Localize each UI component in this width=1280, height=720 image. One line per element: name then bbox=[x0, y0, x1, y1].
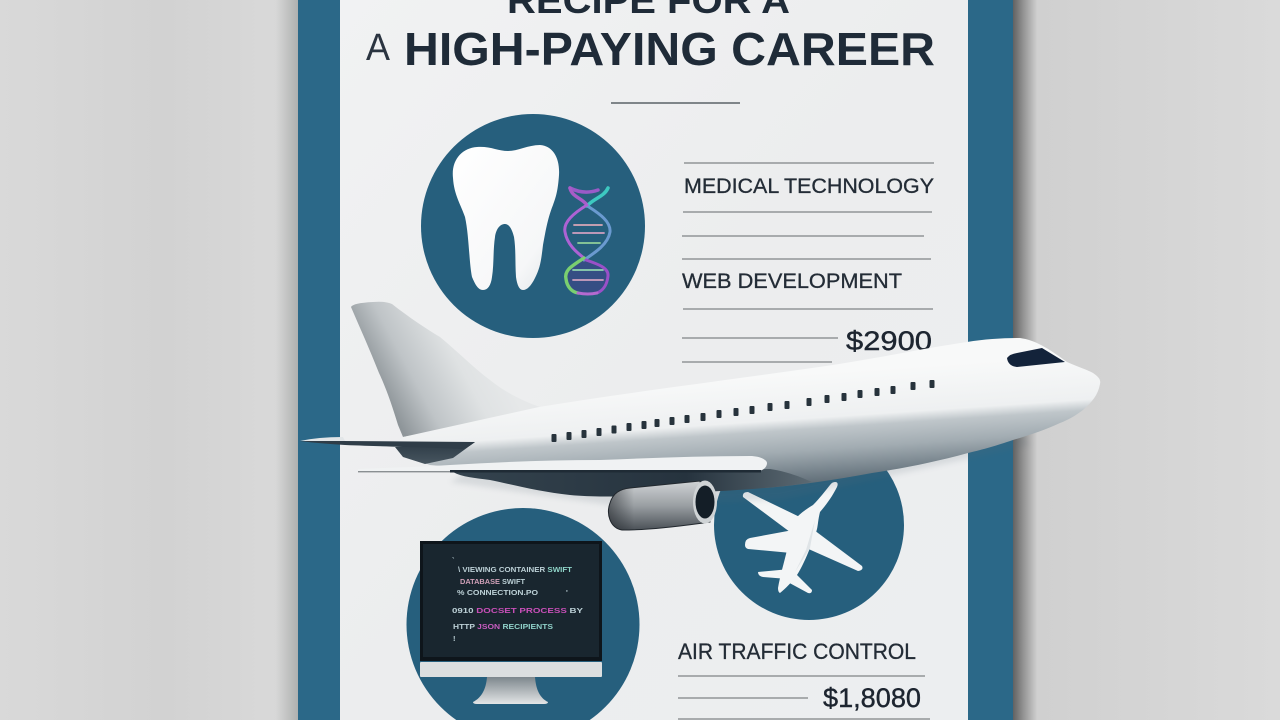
wing bbox=[358, 456, 767, 472]
engine intake rim bbox=[693, 480, 717, 524]
horizontal stabilizer bbox=[300, 440, 475, 449]
panel: web development icon bbox=[406, 508, 640, 720]
label: air traffic control: AIR TRAFFIC CONTROL bbox=[678, 639, 916, 664]
code text: DATABASE SWIFT bbox=[460, 577, 525, 586]
monitor stand bbox=[473, 677, 548, 704]
title small article: A bbox=[366, 27, 391, 69]
panel: air traffic control icon bbox=[714, 430, 904, 620]
title line two: HIGH-PAYING CAREER bbox=[404, 23, 935, 75]
circle badge bbox=[714, 430, 904, 620]
air traffic control lines bbox=[678, 675, 930, 720]
icon: dna helix bbox=[565, 188, 610, 294]
panel: medical technology icon bbox=[421, 114, 645, 338]
stabilizer tip highlight bbox=[300, 437, 345, 441]
wing underside line bbox=[358, 470, 761, 472]
fuselage bbox=[396, 338, 1100, 488]
code text: ' bbox=[566, 588, 568, 597]
poster shadow bbox=[276, 0, 1037, 720]
engine intake bbox=[696, 486, 714, 518]
poster frame bbox=[298, 0, 1013, 720]
circle badge bbox=[406, 508, 640, 720]
poster inner panel bbox=[340, 0, 968, 720]
salary: air traffic control: $1,8080 bbox=[823, 683, 921, 713]
code text: 0910 DOCSET PROCESS BY bbox=[452, 606, 583, 615]
code text: HTTP JSON RECIPIENTS bbox=[453, 622, 553, 631]
airplane illustration bbox=[300, 302, 1100, 530]
plane shadow bbox=[450, 360, 1030, 505]
salary: web development: $2900 bbox=[846, 326, 932, 356]
belly under wing bbox=[453, 469, 812, 496]
code text: \ VIEWING CONTAINER SWIFT bbox=[458, 565, 572, 574]
code text: ! bbox=[453, 634, 456, 643]
panel: career list lines bbox=[682, 162, 934, 363]
monitor chin bbox=[420, 662, 602, 677]
circle badge bbox=[421, 114, 645, 338]
title divider bbox=[611, 102, 740, 104]
icon: computer monitor bbox=[420, 541, 602, 704]
windshield bbox=[1007, 348, 1065, 367]
code text bbox=[452, 556, 583, 643]
tail fin bbox=[351, 302, 540, 437]
icon: small airplane bbox=[743, 482, 862, 593]
label: web development: WEB DEVELOPMENT bbox=[682, 270, 902, 293]
rear fuselage under stabilizer bbox=[395, 442, 475, 464]
engine body bbox=[608, 481, 710, 530]
title bbox=[366, 0, 935, 75]
code text: % CONNECTION.PO bbox=[457, 588, 538, 597]
code text: ` bbox=[452, 556, 455, 565]
engine bbox=[608, 480, 717, 530]
icon: tooth bbox=[453, 145, 559, 290]
monitor screen bbox=[420, 541, 602, 661]
label: medical technology: MEDICAL TECHNOLOGY bbox=[684, 175, 934, 198]
windows bbox=[552, 380, 934, 442]
